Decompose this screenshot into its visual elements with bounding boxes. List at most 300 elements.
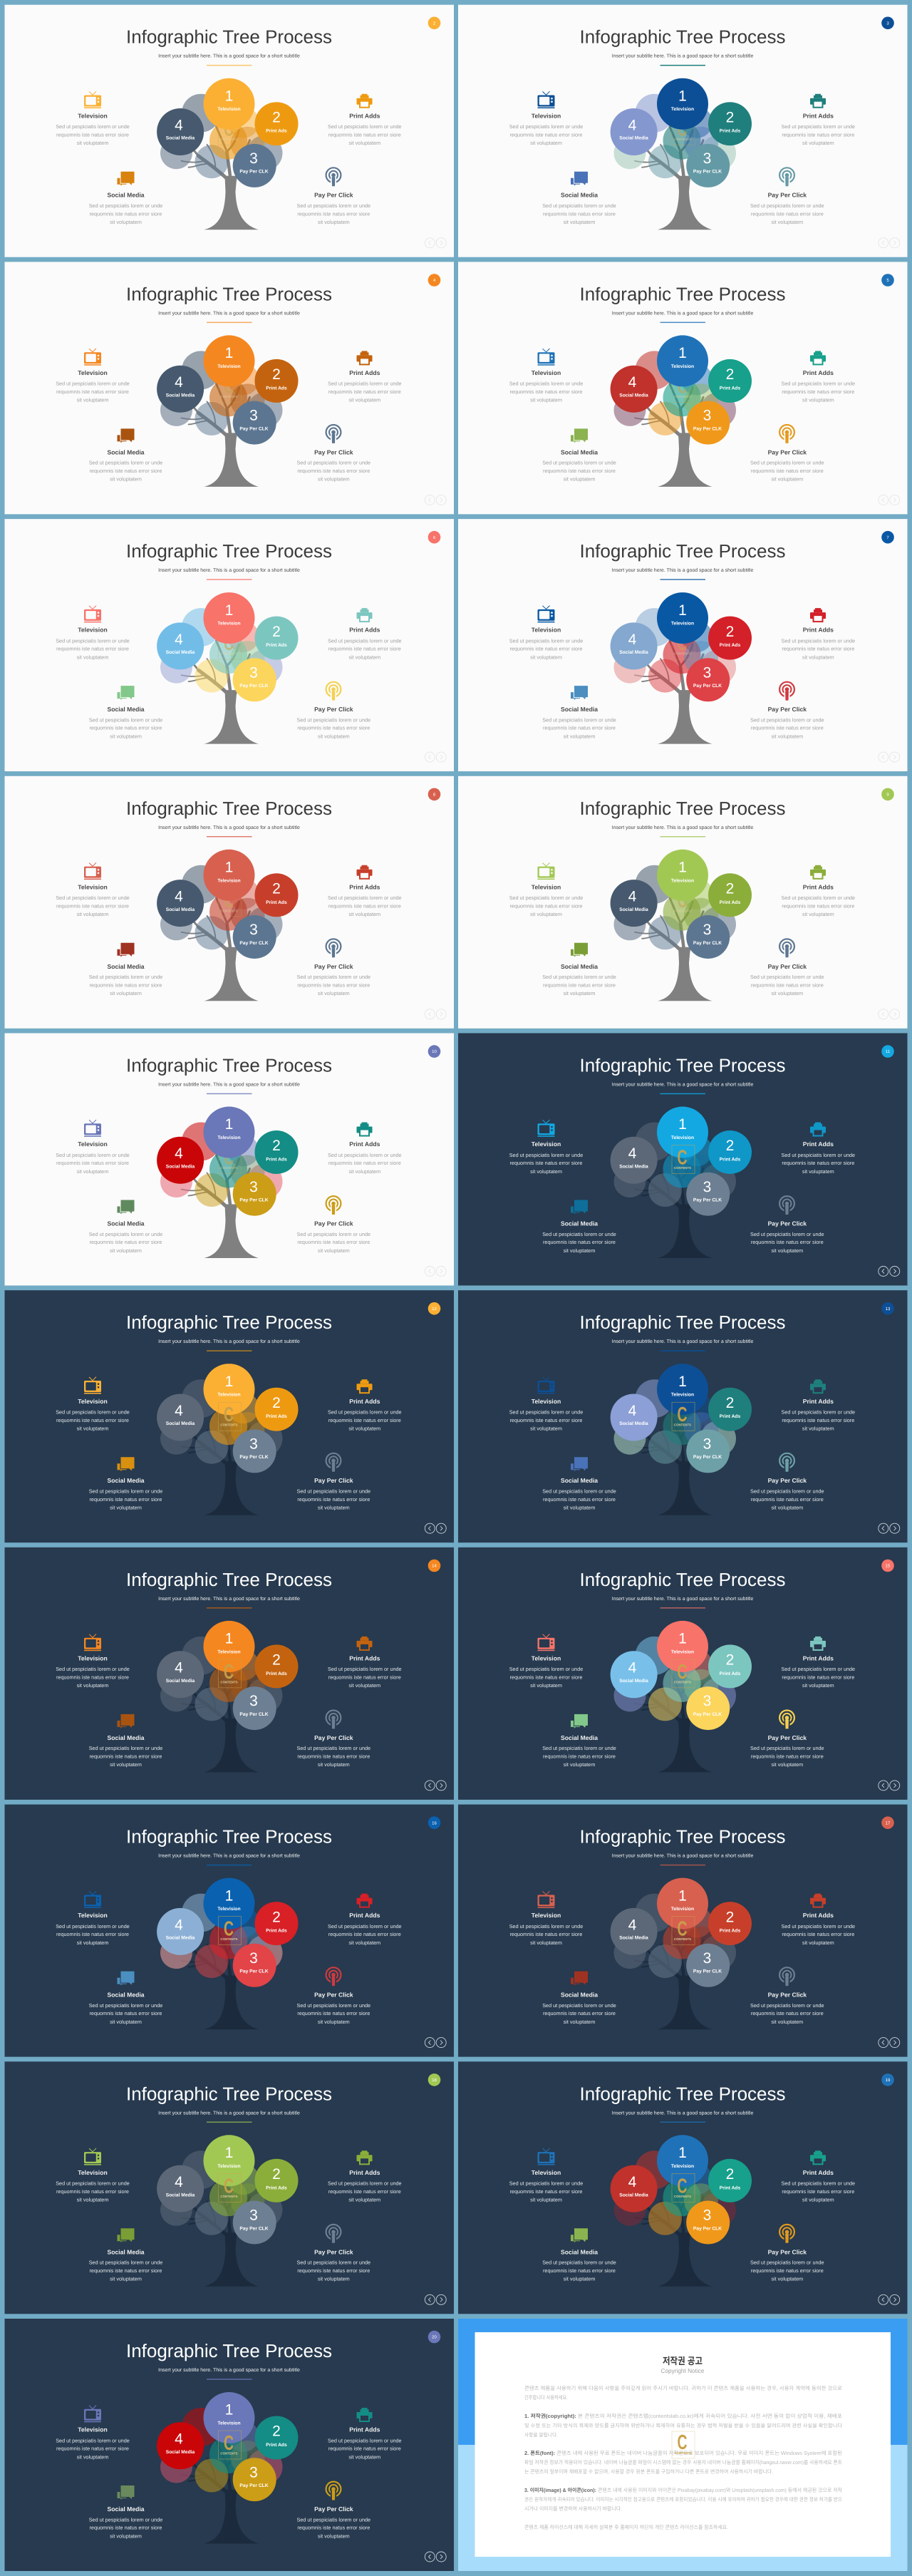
watermark: CONTENTS [220,1937,238,1941]
circle 1 television [657,850,708,901]
title: Infographic Tree Process [579,1569,786,1590]
watermark: CONTENTS [674,138,691,141]
item pay per click: requomnis iste natus error siore [751,210,824,217]
item television: sit voluptatem [530,1682,562,1689]
watermark [218,1917,241,1945]
nav arrows [425,1266,446,1276]
circle 1 television [204,1878,255,1930]
circle 1 television: Television [217,878,241,883]
item television: requomnis iste natus error siore [56,2188,129,2195]
watermark [672,2431,695,2458]
item television: requomnis iste natus error siore [56,646,129,652]
item television: sit voluptatem [530,1425,562,1431]
item social media: sit voluptatem [110,1247,142,1254]
watermark: CONTENTS [674,1680,691,1684]
item television: requomnis iste natus error siore [56,2446,129,2452]
circle 3 pay per clk: Pay Per CLK [239,941,269,946]
item television: requomnis iste natus error siore [510,902,582,909]
page badge [428,1816,440,1829]
item pay per click: sit voluptatem [771,1247,803,1254]
watermark: C [677,632,688,655]
circle 3 pay per clk: Pay Per CLK [239,1969,269,1974]
item pay per click [750,425,824,483]
circle 2 print ads: Print Ads [720,2185,741,2190]
circle 1 television: Television [217,1649,241,1654]
item television [509,1634,583,1689]
item pay per click [297,1453,370,1511]
item print adds: requomnis iste natus error siore [328,1674,401,1680]
nav arrows [425,1523,446,1533]
circle 4 social media [611,1137,658,1184]
item print adds: Sed ut pespiciatis lorem or unde [782,123,855,130]
circle 2 print ads [708,102,752,145]
circle 3 pay per clk: 3 [703,664,711,681]
circle 3 pay per clk [686,1944,730,1987]
circle 2 print ads: 2 [726,366,734,383]
item print adds [328,351,402,403]
accent line [207,65,252,66]
item print adds: Sed ut pespiciatis lorem or unde [328,2180,402,2187]
item television: Television [78,1398,108,1405]
item social media [89,685,162,739]
item print adds: sit voluptatem [348,1682,380,1689]
circle 2 print ads: Print Ads [720,900,741,905]
watermark: C [677,1661,688,1684]
item print adds: Print Adds [803,2169,834,2176]
item social media: requomnis iste natus error siore [543,210,616,217]
item print adds [782,608,855,660]
item print adds: sit voluptatem [802,397,834,403]
item print adds: requomnis iste natus error siore [328,2188,401,2195]
item print adds: sit voluptatem [348,2453,380,2460]
circle 4 social media: Social Media [166,1679,195,1684]
watermark [218,2173,241,2202]
notice body: 및 수정 또는 기타 방식의 복제와 양도를 금지하며 위반하거나 복제하여 유통하는 경우 법적 처벌을 받을 수 있음을 알려드리며 관련 사실을 확인합니다 [524,2422,842,2429]
circle 4 social media [157,880,204,927]
circle 1 television [657,1106,708,1158]
circle 2 print ads [708,1644,752,1688]
title: Infographic Tree Process [126,283,332,304]
circle 3 pay per clk: 3 [703,1436,711,1452]
item television [56,606,130,660]
item pay per click: Pay Per Click [768,963,807,970]
circle 1 television: Television [671,107,694,112]
watermark [218,117,241,145]
item television: sit voluptatem [77,654,108,660]
item print adds: requomnis iste natus error siore [782,131,854,138]
circle 2 print ads: 2 [272,1138,281,1154]
circle 3 pay per clk [686,401,730,445]
panel: slide 10 periwinkle light [4,1034,454,1286]
watermark [672,117,695,145]
item social media: Sed ut pespiciatis lorem or unde [542,2260,616,2266]
item social media: Social Media [107,192,145,199]
item print adds: sit voluptatem [348,911,380,917]
circle 1 television: 1 [678,1887,687,1904]
item television: requomnis iste natus error siore [510,388,582,395]
watermark [672,888,695,917]
circle 1 television [657,592,708,644]
watermark: CONTENTS [220,909,238,912]
title: Infographic Tree Process [126,798,332,819]
page badge: 17 [886,1820,891,1825]
item social media: Social Media [561,448,598,455]
watermark [218,631,241,659]
item television: Television [532,1654,561,1661]
page badge [428,17,440,29]
circle 3 pay per clk: 3 [703,408,711,424]
item pay per click: Pay Per Click [768,1734,807,1741]
panel: slide 8 coral light [4,776,454,1029]
circle 2 print ads: Print Ads [720,1414,741,1419]
item television: requomnis iste natus error siore [56,131,129,138]
circle 4 social media: Social Media [166,1421,195,1426]
page badge: 11 [886,1049,891,1054]
circle 2 print ads [255,1902,298,1945]
accent line [207,322,252,323]
watermark: CONTENTS [674,1166,691,1170]
item social media: requomnis iste natus error siore [543,2010,616,2016]
item social media: Social Media [107,1992,145,1999]
item social media: requomnis iste natus error siore [90,1496,162,1503]
circle 3 pay per clk: 3 [249,922,258,938]
circle 4 social media: Social Media [166,650,195,655]
item pay per click: sit voluptatem [318,1247,350,1254]
circle 2 print ads [708,1902,752,1945]
watermark [218,1402,241,1431]
item social media: sit voluptatem [564,733,595,739]
circle 2 print ads: 2 [272,1652,281,1669]
page badge: 10 [432,1049,437,1054]
circle 1 television: 1 [678,1374,687,1390]
circle 4 social media [157,1908,204,1955]
title: Infographic Tree Process [579,540,786,562]
item print adds: requomnis iste natus error siore [328,1931,401,1937]
nav arrows [425,2038,446,2048]
item social media: sit voluptatem [564,1247,595,1254]
panel: slide 16 blue red dark [4,1805,454,2057]
circle 4 social media: 4 [175,374,183,391]
circle 4 social media [157,2165,204,2212]
title: Infographic Tree Process [579,26,786,48]
item print adds: Sed ut pespiciatis lorem or unde [782,1923,855,1930]
accent line [660,65,705,66]
circle 4 social media: 4 [175,1917,183,1933]
watermark: CONTENTS [220,1423,238,1427]
item pay per click: Sed ut pespiciatis lorem or unde [750,460,824,466]
tree [614,865,736,1001]
circle 1 television [657,1364,708,1415]
item pay per click: requomnis iste natus error siore [297,2525,370,2531]
item print adds: Sed ut pespiciatis lorem or unde [328,637,402,644]
circle 3 pay per clk [233,1173,276,1216]
page badge: 2 [433,21,436,26]
item print adds: Sed ut pespiciatis lorem or unde [328,1152,402,1158]
item pay per click: sit voluptatem [318,990,350,996]
item print adds [328,1379,402,1431]
item pay per click: Pay Per Click [314,1477,353,1484]
notice body [524,2385,842,2530]
nav arrows [425,1781,446,1791]
page badge: 5 [886,278,889,283]
notice body: 파일 저작권 정보가 적용되어 있습니다. 네이버 나눔글꼴 파일이 시스템에 없는 경우 사용자 네이버 나눔글꼴 홈페이지(hangeul.naver.com)를 사용하세요 폰트 [524,2459,842,2466]
circle 3 pay per clk: 3 [249,408,258,424]
item social media: requomnis iste natus error siore [543,468,616,474]
title: Infographic Tree Process [126,540,332,562]
circle 3 pay per clk: 3 [249,664,258,681]
circle 1 television: 1 [678,860,687,876]
nav arrows [879,2038,900,2048]
item television: Television [532,1140,561,1148]
item pay per click: sit voluptatem [318,1761,350,1768]
panel: slide 18 green dark [4,2061,454,2314]
item print adds: sit voluptatem [802,2197,834,2203]
item television: Television [532,112,561,119]
circle 2 print ads: 2 [272,2423,281,2440]
page badge [881,531,894,543]
title: Infographic Tree Process [579,1826,786,1848]
item social media [542,685,616,739]
item pay per click: Sed ut pespiciatis lorem or unde [750,2002,824,2009]
title: Infographic Tree Process [126,2083,332,2104]
item television: requomnis iste natus error siore [56,1417,129,1423]
item television: sit voluptatem [530,1168,562,1175]
item television: sit voluptatem [77,2197,108,2203]
item pay per click: sit voluptatem [318,219,350,225]
page badge [428,1560,440,1572]
accent line [660,836,705,837]
item print adds: sit voluptatem [348,397,380,403]
item social media: Social Media [561,1220,598,1227]
item television [509,1120,583,1175]
item television: Television [78,2426,108,2433]
page badge [428,2073,440,2086]
item social media: Social Media [561,1734,598,1741]
item pay per click: Sed ut pespiciatis lorem or unde [750,1231,824,1237]
item print adds: Sed ut pespiciatis lorem or unde [328,1408,402,1415]
notice heading: 저작권 공고 [663,2356,703,2366]
page badge [428,531,440,543]
page badge [428,2331,440,2343]
nav arrows [879,495,900,505]
page badge: 4 [433,278,436,283]
circle 3 pay per clk [233,2201,276,2244]
item social media: requomnis iste natus error siore [90,982,162,988]
item television: Sed ut pespiciatis lorem or unde [509,1152,583,1158]
circle 2 print ads: 2 [726,624,734,640]
item television: Television [78,883,108,890]
circle 2 print ads [708,617,752,660]
item television: Sed ut pespiciatis lorem or unde [509,2180,583,2187]
item print adds: Print Adds [349,1398,380,1405]
watermark: CONTENTS [220,1166,238,1170]
item social media: Sed ut pespiciatis lorem or unde [542,974,616,980]
item television: Television [78,112,108,119]
item print adds: Print Adds [803,627,834,634]
item pay per click [297,1196,370,1254]
item print adds [782,865,855,917]
item pay per click: sit voluptatem [318,1504,350,1510]
circle 2 print ads [708,1130,752,1174]
page badge: 6 [433,535,436,540]
item pay per click: Sed ut pespiciatis lorem or unde [297,460,370,466]
accent line [207,1093,252,1094]
item social media: sit voluptatem [564,2019,595,2025]
title: Infographic Tree Process [579,798,786,819]
item television: Television [78,1912,108,1919]
item pay per click [297,939,370,996]
item print adds: Print Adds [803,1912,834,1919]
item pay per click: requomnis iste natus error siore [297,1753,370,1759]
item print adds: requomnis iste natus error siore [328,1160,401,1166]
watermark: CONTENTS [220,652,238,656]
item print adds: Print Adds [803,1398,834,1405]
circle 2 print ads [708,2159,752,2203]
tree [160,1379,282,1515]
page badge [881,274,894,287]
title: Infographic Tree Process [126,1826,332,1848]
item television: requomnis iste natus error siore [56,1931,129,1937]
item social media: requomnis iste natus error siore [90,468,162,474]
accent line [660,2121,705,2123]
item print adds: Print Adds [349,1912,380,1919]
circle 2 print ads [708,359,752,403]
circle 3 pay per clk [233,144,276,187]
subtitle: Insert your subtitle here. This is a good space for a short subtitle [158,1082,300,1088]
accent line [660,1350,705,1351]
nav arrows [879,1781,900,1791]
circle 2 print ads: 2 [726,881,734,897]
title: Infographic Tree Process [126,2340,332,2361]
nav arrows [425,238,446,248]
circle 1 television [657,78,708,130]
circle 4 social media: 4 [628,1917,637,1933]
item pay per click: requomnis iste natus error siore [297,468,370,474]
circle 2 print ads: 2 [272,624,281,640]
nav arrows [879,1523,900,1533]
circle 2 print ads: 2 [726,1395,734,1411]
item social media: Sed ut pespiciatis lorem or unde [89,2260,162,2266]
item television: requomnis iste natus error siore [56,1160,129,1166]
circle 1 television: 1 [225,2402,233,2418]
title: Infographic Tree Process [126,1569,332,1590]
nav arrows [425,495,446,505]
item pay per click: Pay Per Click [768,192,807,199]
item print adds: Print Adds [803,1140,834,1148]
item print adds: Sed ut pespiciatis lorem or unde [328,1923,402,1930]
panel: slide 17 coral dark [458,1805,908,2057]
item television: Television [532,1912,561,1919]
title: Infographic Tree Process [126,1312,332,1333]
item pay per click: Pay Per Click [768,2248,807,2255]
item pay per click [750,1967,824,2025]
item social media: Sed ut pespiciatis lorem or unde [89,1488,162,1494]
tree [160,608,282,744]
item social media: requomnis iste natus error siore [90,210,162,217]
item social media: requomnis iste natus error siore [543,982,616,988]
circle 1 television: Television [671,1393,694,1398]
item pay per click: Pay Per Click [768,1220,807,1227]
item television: Sed ut pespiciatis lorem or unde [509,1408,583,1415]
circle 2 print ads: Print Ads [720,1671,741,1676]
item television: Television [78,627,108,634]
circle 4 social media: Social Media [619,1421,648,1426]
tree [160,94,282,230]
circle 2 print ads: 2 [726,1138,734,1154]
item social media [89,2485,162,2539]
circle 1 television: Television [671,2164,694,2169]
item pay per click: requomnis iste natus error siore [297,1239,370,1245]
notice body: 간주합니다 사용하세요. [524,2394,568,2401]
circle 1 television: Television [671,1649,694,1654]
item print adds: Sed ut pespiciatis lorem or unde [328,895,402,901]
notice body: 3. 이미지(image) & 아이콘(icon): 콘텐츠 내에 사용된 이미지와 아이콘은 Pixabay(pixabay.com)와 Unsplash(unsplash.com) 등에서 제공된 것으로 저작 [524,2487,842,2493]
item television [56,2148,130,2203]
item pay per click: Sed ut pespiciatis lorem or unde [297,202,370,209]
circle 4 social media: Social Media [166,2193,195,2198]
item television: Television [78,1140,108,1148]
item print adds: Sed ut pespiciatis lorem or unde [782,2180,855,2187]
watermark: C [224,375,234,398]
item pay per click [750,1453,824,1511]
item pay per click: Sed ut pespiciatis lorem or unde [750,2260,824,2266]
watermark: C [224,890,234,912]
item pay per click [297,682,370,739]
page badge: 12 [432,1307,437,1312]
item pay per click [297,2482,370,2539]
item pay per click: Sed ut pespiciatis lorem or unde [750,1488,824,1494]
circle 3 pay per clk: Pay Per CLK [693,170,722,175]
circle 2 print ads: 2 [272,1909,281,1925]
item print adds [328,865,402,917]
circle 3 pay per clk [233,401,276,445]
item print adds: Sed ut pespiciatis lorem or unde [328,123,402,130]
circle 4 social media: 4 [175,117,183,133]
circle 1 television [204,2392,255,2443]
item print adds: Sed ut pespiciatis lorem or unde [328,2437,402,2443]
panel: slide 19 multicolor dark [458,2061,908,2314]
item print adds [782,2150,855,2203]
watermark: CONTENTS [674,1423,691,1427]
page badge [881,2073,894,2086]
item social media: Sed ut pespiciatis lorem or unde [89,716,162,723]
item print adds: requomnis iste natus error siore [782,646,854,652]
item social media [542,2227,616,2282]
circle 3 pay per clk: Pay Per CLK [693,1197,722,1203]
page badge: 7 [886,535,889,540]
item social media [89,1971,162,2025]
item television: requomnis iste natus error siore [510,1674,582,1680]
item pay per click [750,682,824,739]
item pay per click: requomnis iste natus error siore [751,2010,824,2016]
subtitle: Insert your subtitle here. This is a good space for a short subtitle [612,1082,753,1088]
item print adds: sit voluptatem [802,1168,834,1175]
circle 1 television [204,2135,255,2186]
circle 4 social media: 4 [628,2174,637,2190]
circle 1 television [204,850,255,901]
watermark: C [677,2175,688,2198]
item pay per click: Pay Per Click [314,706,353,713]
circle 1 television: 1 [678,345,687,361]
circle 2 print ads: Print Ads [266,1671,287,1676]
item television [509,1891,583,1946]
item pay per click [750,2225,824,2282]
accent line [207,2121,252,2123]
nav arrows [425,2294,446,2304]
watermark: C [224,2175,234,2198]
watermark: CONTENTS [675,2451,692,2455]
nav arrows [879,1266,900,1276]
